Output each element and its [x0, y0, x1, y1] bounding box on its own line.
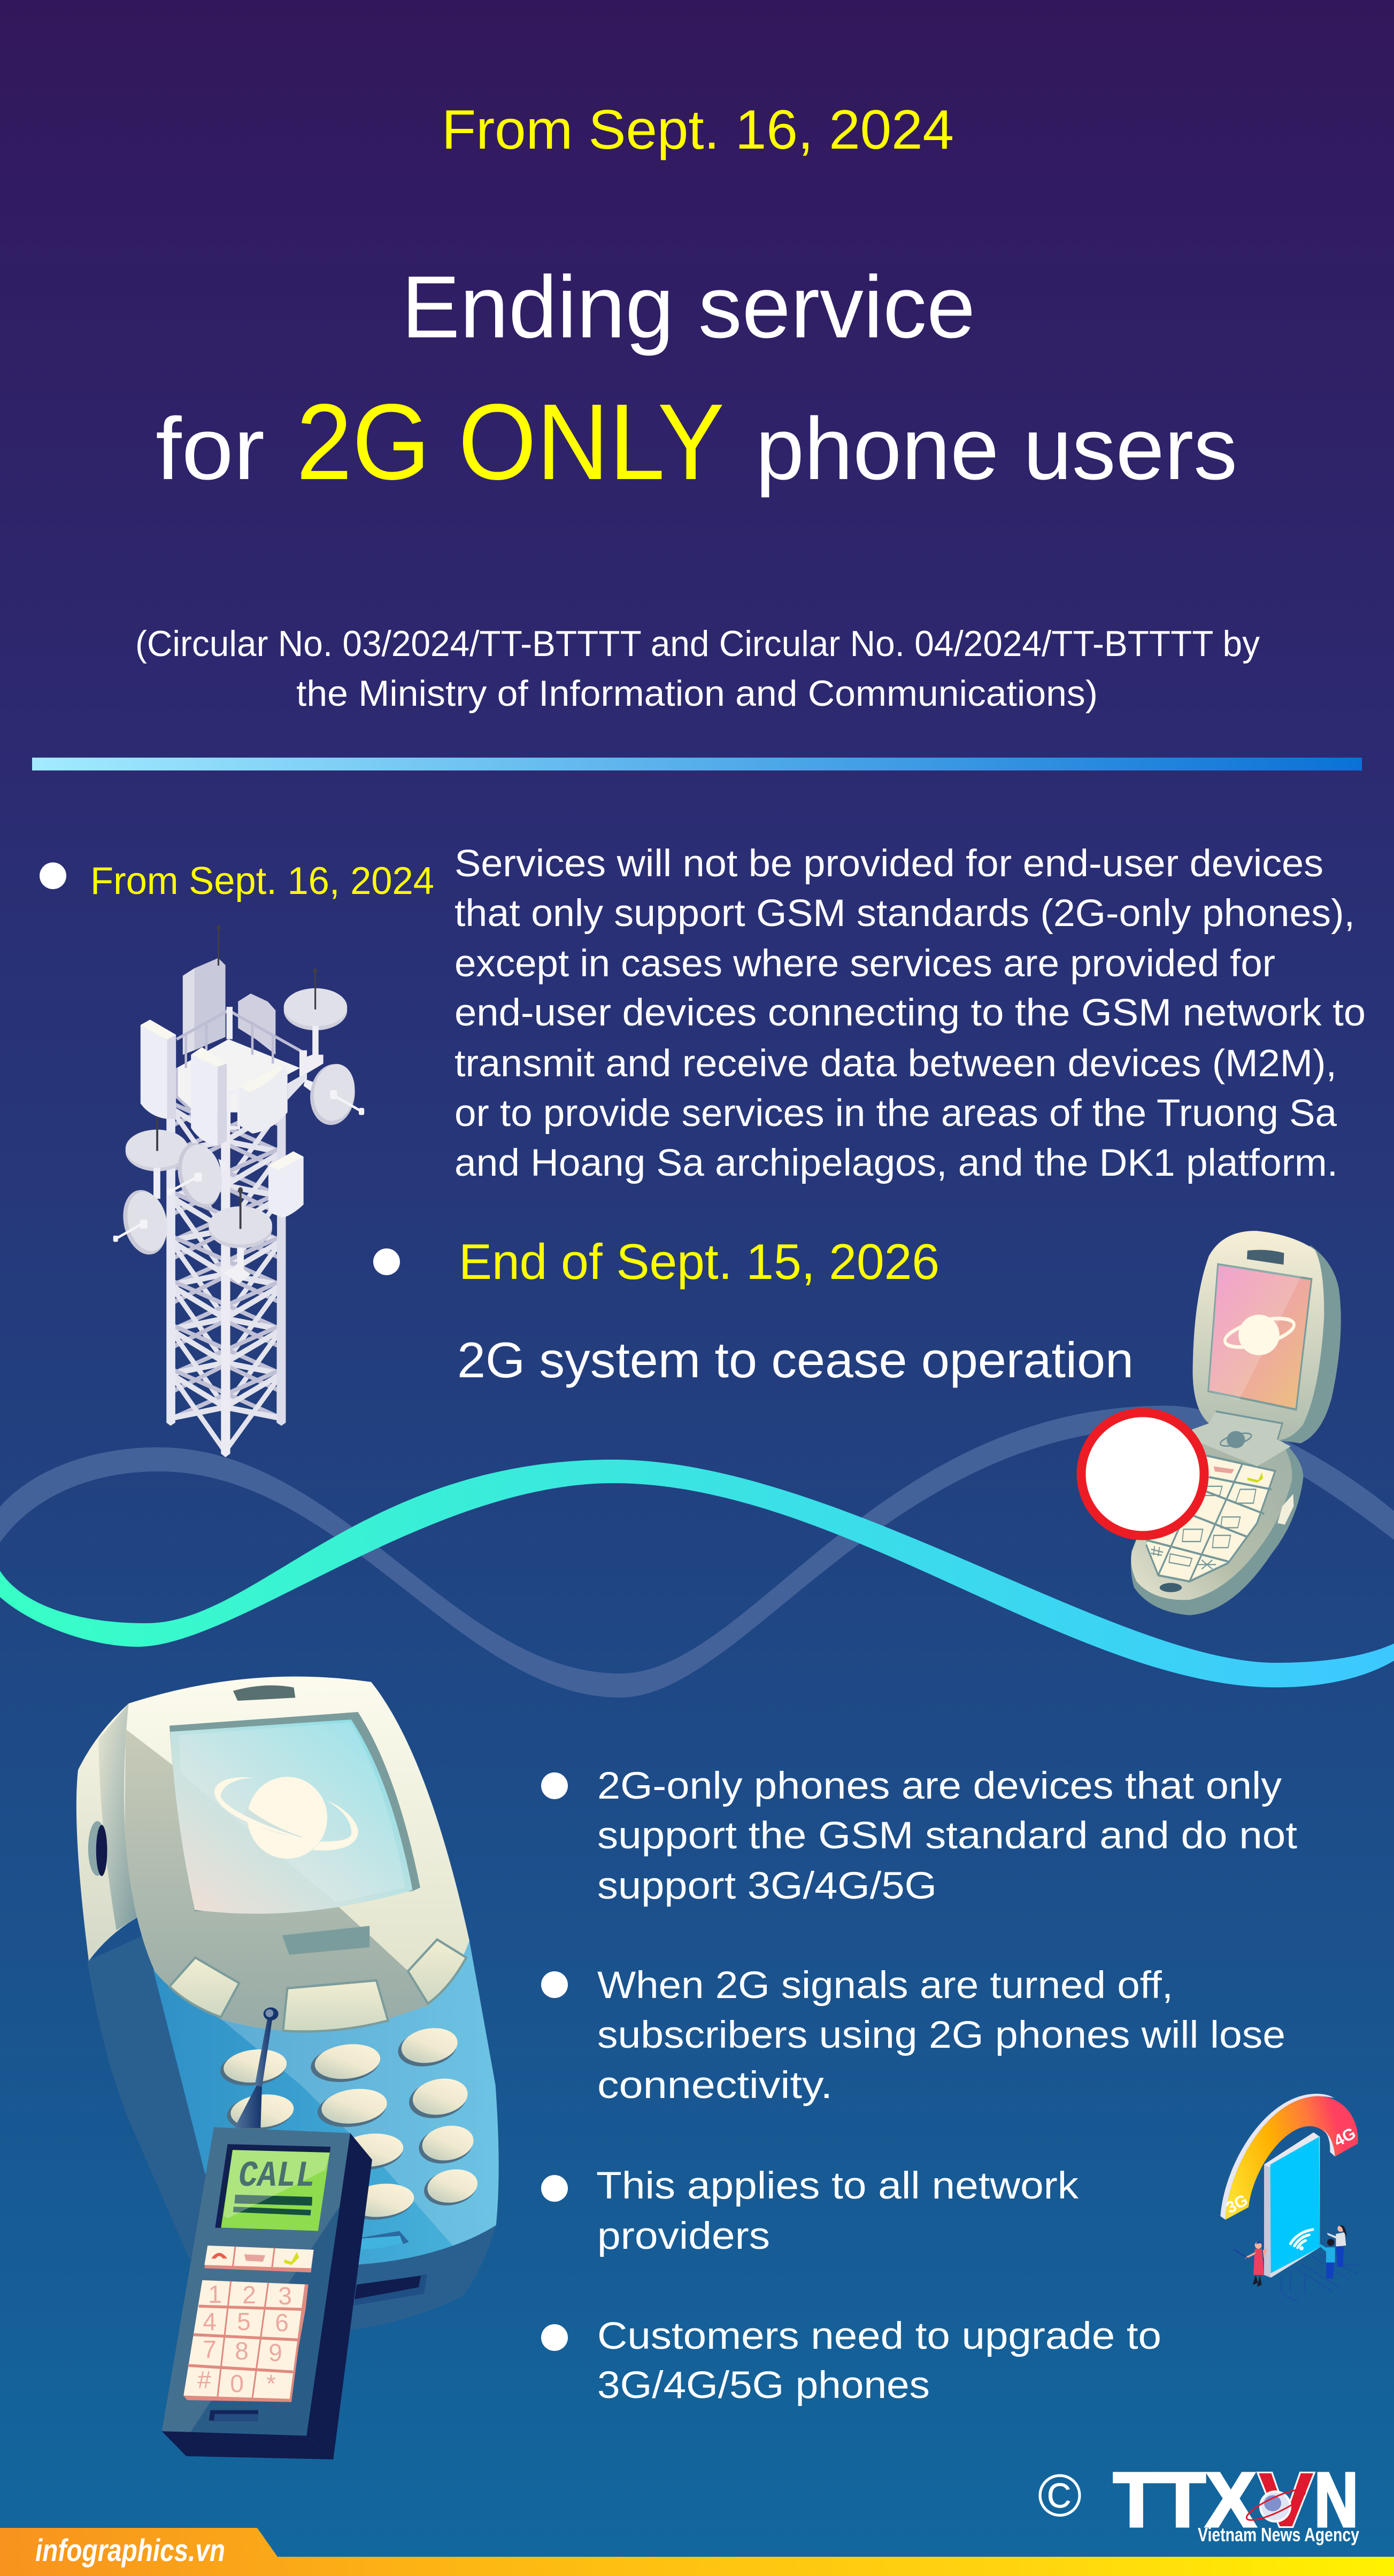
bullet: definition — [541, 1765, 1297, 1907]
paragraph: services: Services will not be provided for end-user devices — [455, 843, 1323, 885]
bullet: lose connectivity: connectivity. — [597, 2064, 833, 2107]
people — [1234, 2225, 1346, 2287]
bullet: all providers — [541, 2165, 1079, 2257]
paragraph: services: except in cases where services are provided for — [455, 943, 1275, 985]
icon: large candybar phone — [76, 1677, 499, 2330]
paragraph: services: or to provide services in the areas of the Truong Sa — [455, 1092, 1337, 1135]
title line 2: for — [156, 399, 265, 498]
icon: handset with CALL screen — [162, 2008, 372, 2459]
wave: teal — [0, 1460, 1394, 1687]
handset keypad digits — [197, 2280, 292, 2397]
CALL display text: CALL — [235, 2155, 319, 2197]
handset keypad digits: 1 — [208, 2280, 222, 2308]
title line 1: Ending service — [402, 258, 975, 356]
paragraph: services: end-user devices connecting to the GSM network to — [455, 992, 1366, 1034]
wifi symbol — [1290, 2230, 1313, 2249]
handset keypad digits: 8 — [235, 2337, 249, 2365]
bullet: upgrade: 3G/4G/5G phones — [597, 2364, 930, 2407]
TTXVN logo: N — [1314, 2457, 1358, 2543]
header — [135, 99, 1260, 714]
handset keypad digits: 0 — [230, 2370, 244, 2397]
icon: 3G to 4G upgrade: 3G — [1223, 2191, 1251, 2217]
TTXVN logo: V — [1258, 2457, 1314, 2543]
icon: flip phone — [1131, 1231, 1341, 1615]
title line 2: 2G ONLY — [296, 381, 725, 502]
gradient rule — [32, 758, 1362, 770]
handset keypad digits: 5 — [237, 2308, 251, 2335]
planet — [214, 1777, 358, 1858]
list: key facts — [541, 1765, 1297, 2407]
handset keypad digits: 6 — [275, 2309, 289, 2336]
site name: infographics.vn — [35, 2533, 225, 2568]
legal basis: (Circular No. 03/2024/TT-BTTTT and Circular No. 04/2024/TT-BTTTT by — [135, 623, 1260, 664]
bullet: all providers: This applies to all network — [596, 2165, 1079, 2207]
handset keypad digits: 3 — [278, 2282, 292, 2310]
TTXVN logo: TTX — [1113, 2457, 1256, 2543]
bullet: definition: support 3G/4G/5G — [597, 1865, 937, 1907]
bullet: all providers: providers — [597, 2215, 770, 2257]
copyright symbol: © — [1038, 2462, 1082, 2529]
keypad — [219, 2024, 480, 2223]
planet — [1223, 1313, 1296, 1355]
bullet: definition: support the GSM standard and do not — [597, 1815, 1297, 1857]
icon: telecom tower — [113, 925, 364, 1457]
bullet: upgrade: Customers need to upgrade to — [597, 2315, 1161, 2357]
date kicker: From Sept. 16, 2024 — [442, 99, 954, 161]
legal basis — [135, 623, 1260, 714]
handset keypad digits: 9 — [268, 2339, 282, 2366]
icon: 3G to 4G upgrade — [1220, 2094, 1360, 2303]
bullet: definition: 2G-only phones are devices that only — [597, 1765, 1282, 1807]
handset keypad digits: 7 — [203, 2335, 217, 2363]
bullet: upgrade — [541, 2315, 1161, 2407]
bullet: lose connectivity — [541, 1964, 1285, 2107]
handset keypad digits: * — [266, 2370, 276, 2397]
paragraph: services: that only support GSM standards (2G-only phones), — [455, 892, 1355, 935]
paragraph: services: and Hoang Sa archipelagos, and the DK1 platform. — [455, 1142, 1338, 1184]
paragraph: services: transmit and receive data between devices (M2M), — [455, 1043, 1337, 1085]
bullet: end of Sept 15 2026: 2G system to cease operation — [457, 1332, 1134, 1388]
wave: faint — [0, 1406, 1394, 1698]
legal basis: the Ministry of Information and Communications) — [296, 673, 1098, 714]
title line 2 — [156, 381, 1237, 502]
bullet: from Sept 16 2024: From Sept. 16, 2024 — [90, 860, 434, 903]
paragraph: services — [455, 843, 1366, 1184]
TTXVN logo — [1113, 2457, 1359, 2546]
footer band — [0, 2528, 1394, 2576]
bullet: end of Sept 15 2026: End of Sept. 15, 2026 — [459, 1233, 939, 1290]
handset keypad digits: 2 — [242, 2281, 256, 2309]
bullet: end of Sept 15 2026 — [373, 1233, 1134, 1388]
icon: 3G to 4G upgrade: 4G — [1331, 2124, 1359, 2150]
bullet: lose connectivity: subscribers using 2G phones will lose — [597, 2014, 1285, 2056]
handset keypad digits: # — [197, 2366, 211, 2394]
title line 2: phone users — [756, 399, 1237, 498]
handset keypad digits: 4 — [203, 2308, 217, 2335]
no-service red circle — [1081, 1413, 1204, 1536]
bullet: lose connectivity: When 2G signals are turned off, — [597, 1964, 1173, 2007]
